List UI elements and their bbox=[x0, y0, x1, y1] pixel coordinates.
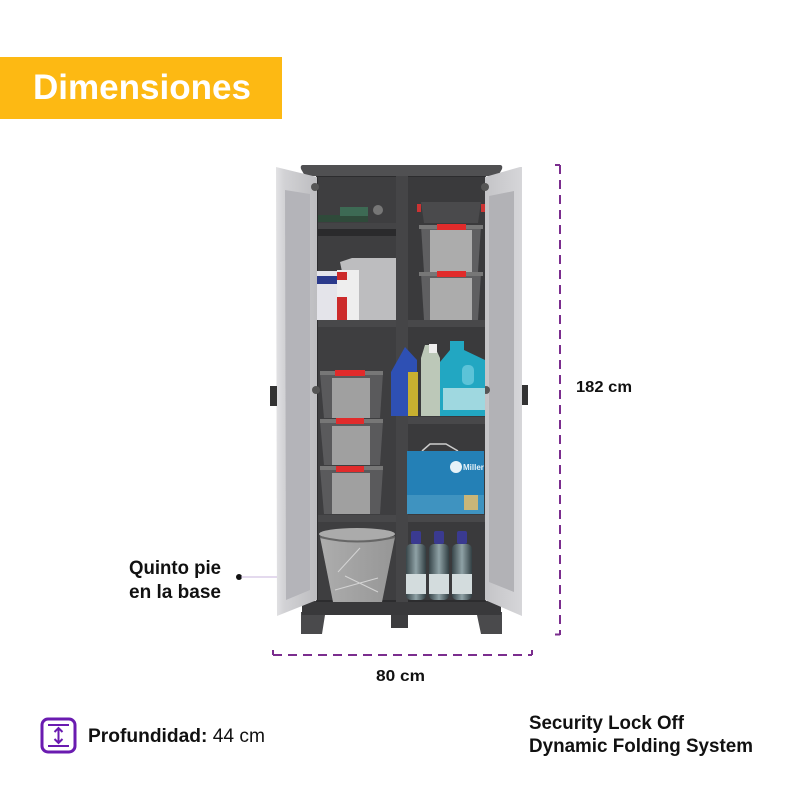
bucket bbox=[319, 528, 395, 602]
cabinet body bbox=[301, 165, 502, 634]
paper roll and containers bbox=[317, 258, 396, 320]
features text bbox=[529, 713, 753, 757]
depth text: Profundidad: 44 cm bbox=[88, 726, 265, 747]
callout: quinto pie: Quinto pie bbox=[129, 558, 221, 579]
cabinet illustration bbox=[270, 165, 528, 634]
cleaning products bbox=[391, 341, 485, 416]
width label: 80 cm bbox=[376, 668, 425, 685]
water bottles bbox=[406, 531, 472, 600]
blue Miller toolbox: Miller bbox=[463, 463, 484, 472]
blue Miller toolbox bbox=[407, 444, 484, 514]
callout: quinto pie bbox=[129, 558, 277, 603]
left door bbox=[270, 167, 317, 616]
height dimension line bbox=[555, 165, 560, 635]
callout: quinto pie: en la base bbox=[129, 582, 221, 603]
features text: Dynamic Folding System bbox=[529, 736, 753, 757]
features text: Security Lock Off bbox=[529, 713, 685, 734]
left stacked storage boxes bbox=[320, 370, 383, 514]
title banner bbox=[0, 57, 282, 119]
height label: 182 cm bbox=[576, 379, 632, 396]
right upper storage boxes bbox=[417, 202, 485, 320]
tools on top shelf bbox=[318, 205, 383, 222]
right door bbox=[311, 167, 528, 616]
width dimension line bbox=[273, 650, 532, 655]
title banner: Dimensiones bbox=[33, 68, 251, 107]
icon: depth bbox=[42, 719, 75, 752]
